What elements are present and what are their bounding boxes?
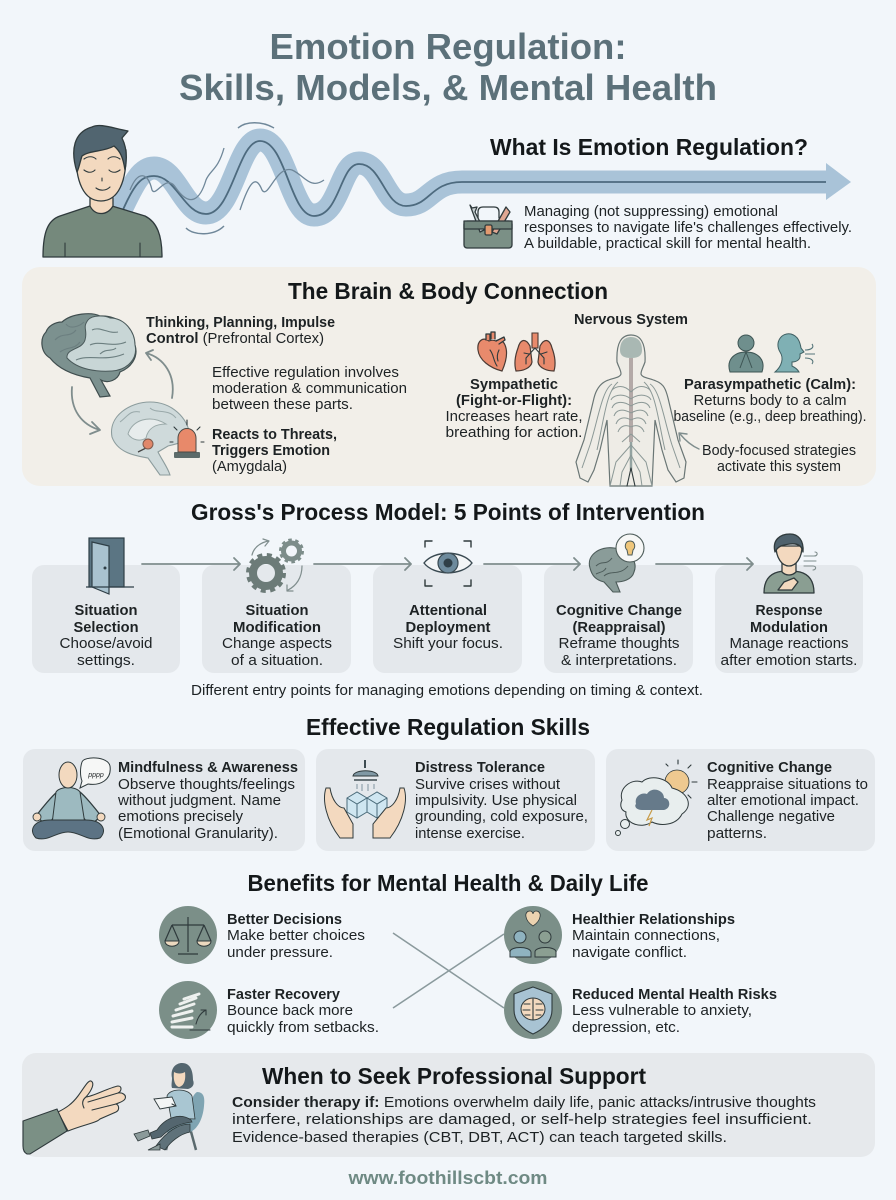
text: sympathetic: [446, 377, 582, 441]
icon: spring and arrow: [159, 981, 217, 1039]
connector lines: [393, 933, 504, 1008]
icon: gears: [248, 539, 302, 591]
icon: toolbox: [464, 205, 512, 248]
icon: scales: [159, 906, 217, 964]
section heading: what is emotion regulation: What Is Emotion Regulation?: [490, 134, 808, 160]
icon: heart: [478, 332, 506, 371]
benefit: reduced risks: depression, etc.: [572, 1020, 680, 1036]
text: cognitive change skill: alter emotional impact.: [707, 793, 859, 809]
text: prefrontal cortex: Thinking, Planning, Impulse: [146, 315, 335, 331]
benefit: healthier relationships: navigate conflict.: [572, 945, 687, 961]
text: effective regulation: Effective regulation involves: [212, 365, 399, 381]
icon: brain with amygdala: [112, 402, 190, 475]
card: distress tolerance: [316, 749, 595, 851]
card: situation selection: Choose/avoid: [60, 636, 152, 652]
card: situation modification: of a situation.: [231, 653, 323, 669]
text: parasympathetic: baseline (e.g., deep breathing).: [674, 409, 866, 425]
card: cognitive change: Cognitive Change: [556, 603, 682, 619]
benefit: better decisions: Better Decisions: [227, 912, 342, 928]
text: definition: [524, 204, 852, 252]
text: sympathetic: Sympathetic: [470, 377, 558, 393]
heading: professional support: When to Seek Professional Support: [262, 1063, 646, 1089]
text: body-focused strategies: activate this system: [717, 459, 841, 475]
emotional wave arrow: [120, 123, 851, 234]
card: situation modification: Change aspects: [222, 636, 332, 652]
icon: reaching hand: [23, 1081, 125, 1154]
text: effective regulation: moderation & communication: [212, 381, 407, 397]
text: distress tolerance: Distress Tolerance: [415, 760, 545, 776]
text: effective regulation: [212, 365, 407, 413]
text: definition: responses to navigate life's challenges effectively.: [524, 220, 852, 236]
text: sympathetic: (Fight-or-Flight):: [456, 393, 572, 409]
text: consider therapy: [232, 1094, 816, 1146]
text: cognitive change skill: Cognitive Change: [707, 760, 832, 776]
benefit: reduced risks: [504, 981, 777, 1039]
person with closed eyes: [43, 126, 162, 257]
benefit: healthier relationships: [504, 906, 735, 964]
icon: breathing profile: [775, 334, 815, 372]
text: amygdala: Reacts to Threats,: [212, 427, 337, 443]
card: cognitive change: [544, 565, 693, 673]
text: amygdala: (Amygdala): [212, 459, 287, 475]
text: cognitive change skill: patterns.: [707, 826, 767, 842]
icon: two people and heart: [504, 906, 562, 964]
arrow: step 2 to 3: [314, 558, 411, 570]
card: response modulation: Response: [756, 603, 822, 619]
arrow: step 1 to 2: [142, 558, 240, 570]
benefit: reduced risks: Less vulnerable to anxiety,: [572, 1003, 752, 1019]
text: prefrontal cortex: Control (Prefrontal Cortex): [146, 331, 324, 347]
arrow: to nervous system: [679, 433, 699, 449]
icon: thought cloud and sun: [616, 760, 697, 836]
heading: process model: Gross's Process Model: 5 Points of Intervention: [191, 499, 705, 525]
arrow: cortex to amygdala: [72, 387, 100, 434]
text: distress tolerance: [415, 760, 588, 842]
text: mindfulness: Mindfulness & Awareness: [118, 760, 298, 776]
card: situation modification: Modification: [233, 620, 321, 636]
card: situation modification: Situation: [246, 603, 308, 619]
title: Emotion Regulation:: [270, 26, 626, 67]
title: [179, 26, 717, 108]
text: cognitive change skill: [707, 760, 868, 842]
icon: nervous system body: [576, 335, 686, 486]
card: situation selection: settings.: [77, 653, 135, 669]
card: mindfulness: [23, 749, 305, 851]
card: situation selection: [32, 565, 180, 673]
card: attentional deployment: [373, 565, 522, 673]
icon: woman in chair: [134, 1063, 204, 1150]
benefit: faster recovery: Faster Recovery: [227, 987, 340, 1003]
text: consider therapy: Consider therapy if: Emotions overwhelm daily life, panic attacks/intrusive thoughts: [232, 1094, 816, 1111]
card: attentional deployment: Deployment: [406, 620, 491, 636]
text: definition: A buildable, practical skill for mental health.: [524, 236, 811, 252]
card: situation selection: Situation: [74, 603, 138, 619]
text: consider therapy: Evidence-based therapies (CBT, DBT, ACT) can teach targeted skills.: [232, 1129, 727, 1146]
heading: effective regulation skills: Effective Regulation Skills: [306, 714, 590, 740]
card: cognitive change: (Reappraisal): [572, 620, 666, 636]
text: body-focused strategies: [702, 443, 856, 475]
benefit: better decisions: [159, 906, 365, 964]
arrow: step 3 to 4: [484, 558, 580, 570]
icon: lungs: [515, 333, 555, 371]
text: cognitive change skill: Reappraise situations to: [707, 777, 868, 793]
text: distress tolerance: Survive crises without: [415, 777, 560, 793]
text: sympathetic: breathing for action.: [446, 425, 582, 441]
card: response modulation: Manage reactions: [730, 636, 848, 652]
card: situation modification: [202, 565, 351, 673]
benefit: healthier relationships: Healthier Relationships: [572, 912, 735, 928]
text: parasympathetic: [674, 377, 866, 425]
card: cognitive change: & interpretations.: [561, 653, 677, 669]
text: mindfulness: Observe thoughts/feelings: [118, 777, 295, 793]
text: mindfulness: without judgment. Name: [117, 793, 281, 809]
card: cognitive change skill: [606, 749, 875, 851]
icon: brain with lightbulb: [589, 534, 644, 592]
text: distress tolerance: grounding, cold exposure,: [415, 809, 588, 825]
icon: meditating person: [32, 758, 110, 839]
icon: brain prefrontal cortex: [42, 314, 136, 397]
heading: benefits: Benefits for Mental Health & Daily Life: [248, 870, 648, 896]
icon: shower, ice and hands: [325, 760, 405, 838]
icon: shield with brain: [504, 981, 562, 1039]
icon: eye: [424, 541, 472, 586]
benefit: better decisions: Make better choices: [227, 928, 365, 944]
card: response modulation: Modulation: [750, 620, 828, 636]
text: distress tolerance: impulsivity. Use physical: [415, 793, 577, 809]
card: response modulation: [715, 565, 863, 673]
text: parasympathetic: Returns body to a calm: [694, 393, 846, 409]
text: mindfulness: [117, 760, 298, 842]
icon: calm person praying: [729, 335, 763, 372]
benefit: better decisions: under pressure.: [227, 945, 333, 961]
panel: professional support: [22, 1053, 875, 1157]
text: consider therapy: interfere, relationships are damaged, or self-help strategies feel insufficient.: [232, 1111, 812, 1128]
text: mindfulness: emotions precisely: [118, 809, 244, 825]
benefit: faster recovery: quickly from setbacks.: [227, 1020, 379, 1036]
icon: door: [86, 538, 134, 594]
heading: brain and body: The Brain & Body Connection: [288, 278, 608, 304]
text: different entry points: Different entry points for managing emotions depending on timing & context.: [191, 683, 703, 699]
text: parasympathetic: Parasympathetic (Calm):: [684, 377, 856, 393]
card: cognitive change: Reframe thoughts: [558, 636, 680, 652]
arrow: amygdala to cortex: [146, 350, 173, 398]
icon: person hand on chest: [764, 534, 817, 593]
benefit: faster recovery: Bounce back more: [227, 1003, 353, 1019]
arrow: step 4 to 5: [656, 558, 753, 570]
label: nervous system: Nervous System: [574, 312, 688, 328]
card: situation selection: Selection: [74, 620, 138, 636]
text: effective regulation: between these parts.: [212, 397, 353, 413]
text: cognitive change skill: Challenge negative: [707, 809, 835, 825]
text: definition: Managing (not suppressing) emotional: [524, 204, 778, 220]
card: attentional deployment: Attentional: [409, 603, 487, 619]
footer url: www.foothillscbt.com: [347, 1168, 548, 1188]
text: sympathetic: Increases heart rate,: [446, 409, 582, 425]
text: prefrontal cortex: [146, 315, 335, 347]
benefit: healthier relationships: Maintain connections,: [572, 928, 720, 944]
text: distress tolerance: intense exercise.: [415, 826, 525, 842]
benefit: faster recovery: [159, 981, 379, 1039]
text: body-focused strategies: Body-focused strategies: [702, 443, 856, 459]
card: response modulation: after emotion starts.: [720, 653, 858, 669]
icon: alarm light: [170, 420, 204, 458]
benefit: reduced risks: Reduced Mental Health Risks: [572, 987, 777, 1003]
text: amygdala: Triggers Emotion: [212, 443, 330, 459]
card: attentional deployment: Shift your focus.: [393, 636, 503, 652]
panel: brain and body connection: [22, 267, 876, 486]
icon: meditating person: pppp: [87, 772, 104, 779]
text: amygdala: [212, 427, 337, 475]
text: mindfulness: (Emotional Granularity).: [118, 826, 278, 842]
title: Skills, Models, & Mental Health: [179, 67, 717, 108]
